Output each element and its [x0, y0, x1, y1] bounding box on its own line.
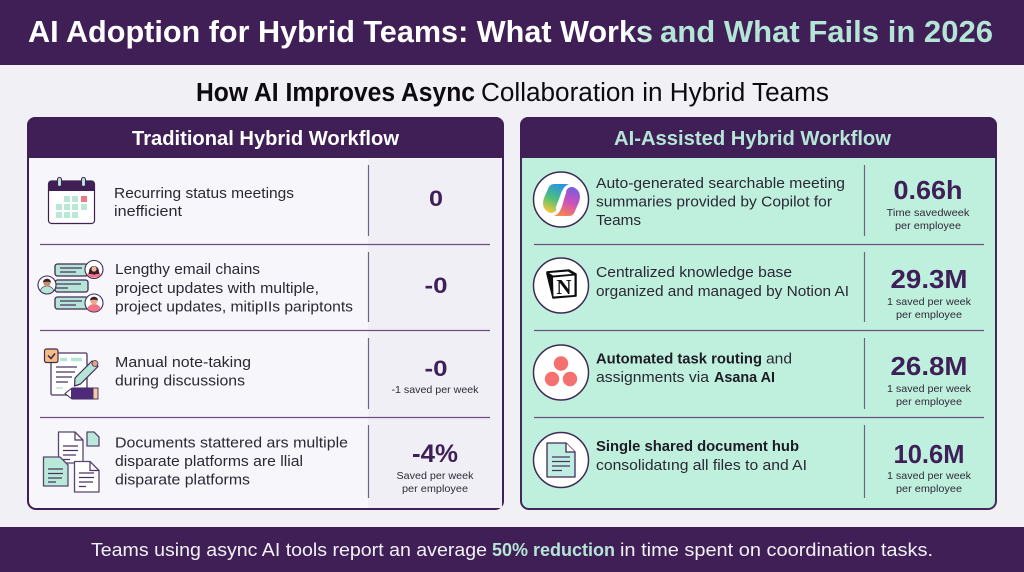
icon: scattered documents — [44, 432, 99, 492]
row text: documents scattered: disparate platforms — [115, 472, 250, 488]
value: 26.8M — [887, 351, 972, 408]
row text: knowledge base: organized and managed by Notion AI — [596, 283, 849, 300]
value: -4%: -4% — [412, 440, 458, 468]
row text: recurring status meetings — [114, 185, 294, 220]
panel heading: Traditional Hybrid Workflow — [132, 127, 399, 150]
row text: task routing: Automated task routing — [596, 350, 762, 368]
row text: meeting summaries — [596, 175, 845, 229]
title banner — [0, 0, 1024, 65]
footer banner: Teams using async AI tools report an average — [91, 540, 487, 560]
subtitle — [196, 79, 829, 107]
value: 26.8M: per employee — [896, 396, 962, 408]
row text: documents scattered: Documents stattered ars multiple — [115, 434, 348, 452]
footer banner: in time spent on coordination tasks. — [620, 540, 933, 560]
value: 10.6M — [887, 439, 972, 495]
value: -0 saved per week: -0 — [424, 356, 448, 381]
title banner: and What Fails in 2026 — [660, 15, 993, 49]
row text: lengthy email chains: Lengthy email chains — [115, 261, 260, 278]
value: 0.66h: 0.66h — [894, 175, 962, 205]
value: 26.8M: 1 saved per week — [887, 383, 972, 395]
row text: documents scattered — [115, 434, 348, 488]
value: 0.66h — [886, 175, 970, 232]
row text: document hub: Single shared document hub — [596, 438, 799, 455]
icon: Asana logo — [534, 345, 588, 400]
value: 29.3M: 1 saved per week — [887, 296, 972, 308]
row text: meeting summaries: Auto-generated searchable meeting — [596, 175, 845, 192]
value: 29.3M: 29.3M — [890, 264, 968, 294]
icon: shared document — [534, 432, 588, 488]
value: -0 saved per week: -1 saved per week — [392, 384, 479, 396]
value: 26.8M: 26.8M — [890, 351, 968, 381]
row text: manual note-taking: Manual note-taking — [115, 354, 251, 371]
row text: document hub — [596, 438, 807, 474]
row text: manual note-taking: during discussions — [115, 372, 245, 390]
row text: task routing: assignments via — [596, 369, 710, 386]
row text: documents scattered: disparate platforms are llial — [115, 453, 303, 470]
row text: recurring status meetings: Recurring status meetings — [114, 185, 294, 202]
value: -4%: per employee — [402, 483, 468, 495]
row text: lengthy email chains — [115, 261, 353, 316]
value: 10.6M: per employee — [896, 483, 962, 495]
value: -4% — [396, 440, 474, 495]
value: 0: 0 — [429, 186, 443, 211]
footer banner: 50% reduction — [492, 540, 615, 560]
panel heading: AI-Assisted Hybrid Workflow — [614, 127, 891, 150]
icon: Notion logo — [534, 258, 588, 313]
row text: lengthy email chains: project updates, mitipIIs pariptonts — [115, 298, 353, 316]
icon: Copilot logo — [534, 172, 588, 227]
title banner: AI Adoption for Hybrid Teams: What Works — [28, 15, 653, 49]
subtitle: How AI Improves Async — [196, 79, 475, 107]
row text: meeting summaries: summaries provided by Copilot for — [596, 194, 832, 210]
icon: manual notes with pencil — [44, 349, 98, 399]
row text: meeting summaries: Teams — [596, 212, 641, 229]
value: 0.66h: per employee — [895, 220, 961, 232]
panel: AI-assisted hybrid workflow — [520, 117, 997, 509]
row text: lengthy email chains: project updates with multiple, — [115, 280, 319, 297]
value: -4%: Saved per week — [396, 470, 474, 482]
value: 10.6M: 1 saved per week — [887, 470, 972, 482]
footer banner — [0, 527, 1024, 572]
subtitle: Collaboration in Hybrid Teams — [481, 79, 829, 107]
value: 0.66h: Time savedweek — [886, 207, 970, 219]
row text: task routing: and — [766, 350, 792, 368]
panel: traditional hybrid workflow — [27, 117, 504, 509]
row text: document hub: consolidatıng all files to and AI — [596, 457, 807, 474]
row text: task routing — [596, 350, 792, 386]
icon: calendar — [48, 178, 95, 224]
row text: knowledge base: Centralized knowledge base — [596, 264, 792, 281]
row text: manual note-taking — [115, 354, 251, 390]
value: -0: -0 — [424, 273, 448, 298]
row text: knowledge base — [596, 264, 849, 300]
value: -0 saved per week — [392, 356, 479, 396]
row text: recurring status meetings: inefficient — [114, 203, 183, 220]
icon: Notion logo: N — [556, 275, 572, 299]
value: 10.6M: 10.6M — [894, 439, 964, 469]
value: 29.3M — [887, 264, 972, 321]
icon: email chain people — [38, 260, 103, 312]
value: 29.3M: per employee — [896, 309, 962, 321]
row text: task routing: Asana AI — [714, 369, 775, 386]
